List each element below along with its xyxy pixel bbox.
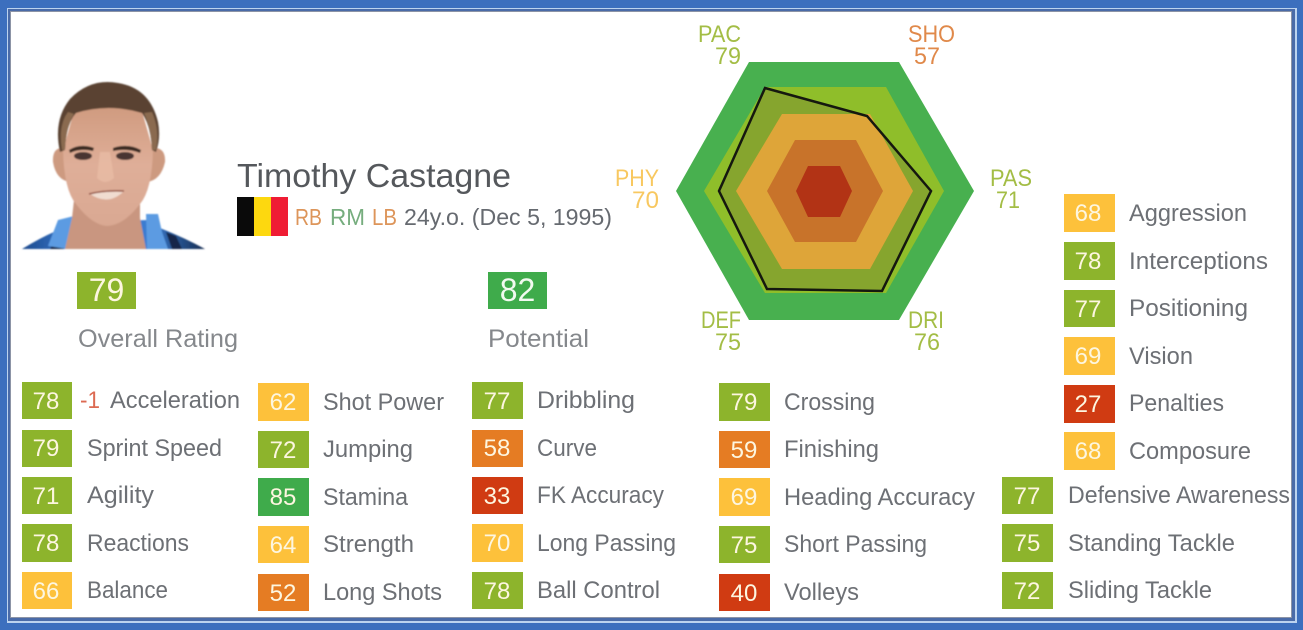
stat: Dribbling: Dribbling — [537, 387, 635, 414]
stat: Balance: Balance — [87, 577, 168, 604]
stat: Sprint Speed: Sprint Speed — [87, 435, 222, 462]
stat: Interceptions: 78 — [1075, 248, 1101, 275]
stat: Reactions: 78 — [33, 530, 59, 557]
stat: Finishing — [719, 431, 879, 468]
overall rating: 79 — [89, 272, 124, 308]
radar label: PAC: 79 — [715, 43, 741, 70]
stat: Finishing: 59 — [731, 437, 757, 464]
overall rating: Overall Rating — [78, 325, 238, 353]
panel: stats column 2 — [258, 383, 444, 611]
stat: Penalties — [1064, 385, 1224, 423]
stat: Agility — [22, 477, 154, 514]
stat: Heading Accuracy: 69 — [731, 484, 757, 511]
radar label: PHY — [615, 165, 659, 214]
stat: Aggression — [1064, 194, 1247, 232]
panel: stats column 4 — [719, 383, 975, 611]
radar chart — [676, 62, 974, 320]
radar label: PAS — [990, 165, 1032, 214]
stat: Agility: Agility — [87, 482, 154, 509]
stat: Long Shots: Long Shots — [323, 579, 442, 606]
panel: stats column 3 — [472, 382, 676, 609]
stat: Vision: Vision — [1129, 343, 1193, 370]
stat: Composure: Composure — [1129, 438, 1251, 465]
stat: Ball Control: Ball Control — [537, 577, 660, 604]
stat: Jumping — [258, 431, 413, 468]
stat: Shot Power: 62 — [270, 389, 296, 416]
stat: Agility: 71 — [33, 483, 59, 510]
player positions and birth date: RM — [330, 204, 365, 230]
radar label: PAC: PAC — [698, 21, 741, 48]
stat: Crossing — [719, 383, 875, 421]
icon: player portrait — [22, 82, 205, 249]
stat: Reactions: Reactions — [87, 530, 189, 557]
stat: Vision — [1064, 337, 1193, 375]
stat: Sliding Tackle — [1002, 572, 1212, 609]
stat: Strength: 64 — [270, 532, 296, 559]
stat: Reactions — [22, 524, 189, 562]
stat: Sliding Tackle: 72 — [1014, 578, 1040, 605]
stat: Dribbling: 77 — [484, 388, 510, 415]
stat: Vision: 69 — [1075, 343, 1101, 370]
stat: FK Accuracy: 33 — [484, 483, 510, 510]
stat: Stamina — [258, 478, 409, 516]
stat: Crossing: Crossing — [784, 389, 875, 416]
stat: Defensive Awareness: Defensive Awareness — [1068, 482, 1290, 509]
stat: FK Accuracy — [472, 477, 664, 514]
stat: Finishing: Finishing — [784, 436, 879, 463]
stat: Acceleration: -1 — [80, 387, 100, 414]
stat: Curve: 58 — [484, 435, 510, 462]
stat: Long Shots — [258, 574, 442, 611]
stat: Balance: 66 — [33, 578, 59, 605]
stat: Aggression: Aggression — [1129, 200, 1247, 227]
stat: Curve — [472, 430, 597, 467]
stat: Balance — [22, 572, 168, 609]
stat: Strength: Strength — [323, 531, 414, 558]
stat: Long Passing — [472, 524, 676, 562]
potential rating: Potential — [488, 325, 589, 353]
stat: Interceptions — [1064, 242, 1268, 280]
radar label: DEF: DEF — [701, 307, 741, 334]
player positions and birth date: LB — [372, 204, 397, 230]
stat: Shot Power: Shot Power — [323, 389, 444, 416]
stat: Acceleration — [22, 382, 240, 419]
stat: Jumping: Jumping — [323, 436, 413, 463]
radar label: DRI: 76 — [914, 329, 940, 356]
stat: Sprint Speed: 79 — [33, 435, 59, 462]
stat: FK Accuracy: FK Accuracy — [537, 482, 664, 509]
stat: Positioning: 77 — [1075, 296, 1101, 323]
stat: Aggression: 68 — [1075, 200, 1101, 227]
stat: Composure: 68 — [1075, 438, 1101, 465]
stat: Strength — [258, 526, 414, 563]
stat: Acceleration: 78 — [33, 388, 59, 415]
radar label: PAS: 71 — [996, 187, 1020, 214]
panel: stats column 5 — [1064, 194, 1268, 470]
radar label: PHY: PHY — [615, 165, 659, 192]
radar label: PAC — [698, 21, 741, 70]
radar label: PHY: 70 — [632, 187, 659, 214]
stat: Short Passing: Short Passing — [784, 531, 927, 558]
radar label: DRI: DRI — [908, 307, 944, 334]
stat: Stamina: 85 — [270, 484, 296, 511]
stat: Jumping: 72 — [270, 437, 296, 464]
stat: Defensive Awareness — [1002, 477, 1290, 514]
stat: Interceptions: Interceptions — [1129, 248, 1268, 275]
stat: Penalties: Penalties — [1129, 390, 1224, 417]
heading: player name: Timothy Castagne — [237, 157, 511, 194]
stat: Standing Tackle — [1002, 524, 1235, 562]
stat: Volleys: Volleys — [784, 579, 859, 606]
stat: Positioning: Positioning — [1129, 295, 1248, 322]
stat: Acceleration: Acceleration — [110, 387, 240, 414]
potential rating — [488, 272, 589, 353]
player positions and birth date: 24y.o. (Dec 5, 1995) — [404, 204, 612, 230]
stat: Defensive Awareness: 77 — [1014, 483, 1040, 510]
stat: Ball Control: 78 — [484, 578, 510, 605]
radar label: DEF: 75 — [715, 329, 741, 356]
potential rating: 82 — [500, 272, 535, 308]
stat: Short Passing: 75 — [731, 532, 757, 559]
overall rating — [77, 272, 238, 353]
radar label: PAS: PAS — [990, 165, 1032, 192]
stat: Composure — [1064, 432, 1251, 470]
stat: Positioning — [1064, 290, 1248, 327]
stat: Heading Accuracy: Heading Accuracy — [784, 484, 975, 511]
stat: Volleys — [719, 574, 859, 611]
stat: Shot Power — [258, 383, 444, 421]
stat: Ball Control — [472, 572, 660, 609]
stat: Heading Accuracy — [719, 478, 975, 516]
stat: Dribbling — [472, 382, 635, 419]
radar label: SHO: 57 — [914, 43, 940, 70]
stat: Long Shots: 52 — [270, 580, 296, 607]
radar label: DRI — [908, 307, 944, 356]
player positions and birth date: RB — [295, 204, 322, 230]
stat: Long Passing: 70 — [484, 530, 510, 557]
stat: Curve: Curve — [537, 435, 597, 462]
stat: Sliding Tackle: Sliding Tackle — [1068, 577, 1212, 604]
stat: Crossing: 79 — [731, 389, 757, 416]
player positions and birth date — [295, 204, 612, 230]
radar label: DEF — [701, 307, 741, 356]
radar label: SHO — [908, 21, 955, 70]
stat: Stamina: Stamina — [323, 484, 409, 511]
stat: Standing Tackle: Standing Tackle — [1068, 530, 1235, 557]
stat: Penalties: 27 — [1075, 391, 1101, 418]
panel: stats column 1 — [22, 382, 240, 609]
stat: Standing Tackle: 75 — [1014, 530, 1040, 557]
radar label: SHO: SHO — [908, 21, 955, 48]
stat: Sprint Speed — [22, 430, 222, 467]
stat: Long Passing: Long Passing — [537, 530, 676, 557]
icon: Belgian flag — [237, 197, 288, 236]
panel: stats column 6 — [1002, 477, 1290, 609]
stat: Short Passing — [719, 526, 927, 563]
stat: Volleys: 40 — [731, 580, 757, 607]
